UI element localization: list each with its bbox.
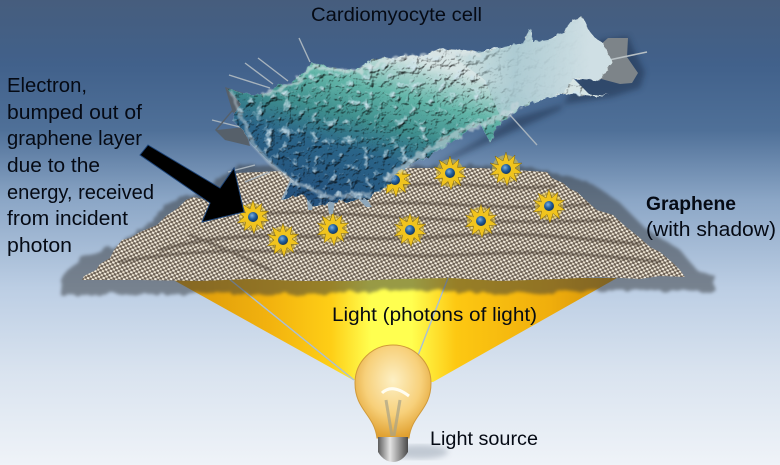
cell legs [281, 176, 372, 214]
filament [386, 400, 400, 436]
cell spike on tip [590, 52, 647, 64]
cell spikes [212, 38, 537, 182]
graphene shadow [60, 165, 716, 295]
cell dark flaps [215, 87, 255, 146]
light cone [170, 278, 617, 382]
glow [382, 389, 409, 396]
cell left rim [232, 92, 372, 197]
electron callout text: Electron, [7, 75, 87, 97]
bulb base [378, 437, 408, 462]
electron callout text: due to the [7, 155, 100, 177]
graphene sheet [82, 168, 685, 281]
cell pale right arm [450, 17, 612, 116]
electron callout text: photon [7, 235, 72, 257]
cardiomyocyte cell [212, 17, 647, 214]
electron callout text: from incident [7, 208, 128, 230]
bulb shadow [392, 445, 448, 459]
arrow [140, 145, 244, 222]
bulb glass [355, 345, 431, 438]
cell top rim [262, 53, 480, 95]
electron callout text [7, 75, 154, 257]
title: cell label: Cardiomyocyte cell [311, 5, 482, 26]
graphene label: (with shadow) [646, 219, 776, 241]
graphene label: Graphene [646, 194, 736, 215]
cell shadow [330, 36, 645, 205]
cell lower right rim [385, 104, 520, 180]
cell body [228, 17, 612, 207]
light bulb [355, 345, 448, 462]
electron callout text: energy, received [7, 182, 154, 204]
light ray left [228, 278, 354, 380]
light source label: Light source [430, 429, 538, 450]
light label: Light (photons of light) [332, 305, 537, 326]
cell grey tip [590, 38, 638, 84]
electron callout text: graphene layer [7, 128, 142, 150]
electron callout text: bumped out of [7, 102, 142, 124]
graphene label [646, 194, 776, 241]
graphene ripples [120, 184, 660, 270]
light ray right [417, 278, 448, 358]
electron stars [237, 152, 565, 257]
